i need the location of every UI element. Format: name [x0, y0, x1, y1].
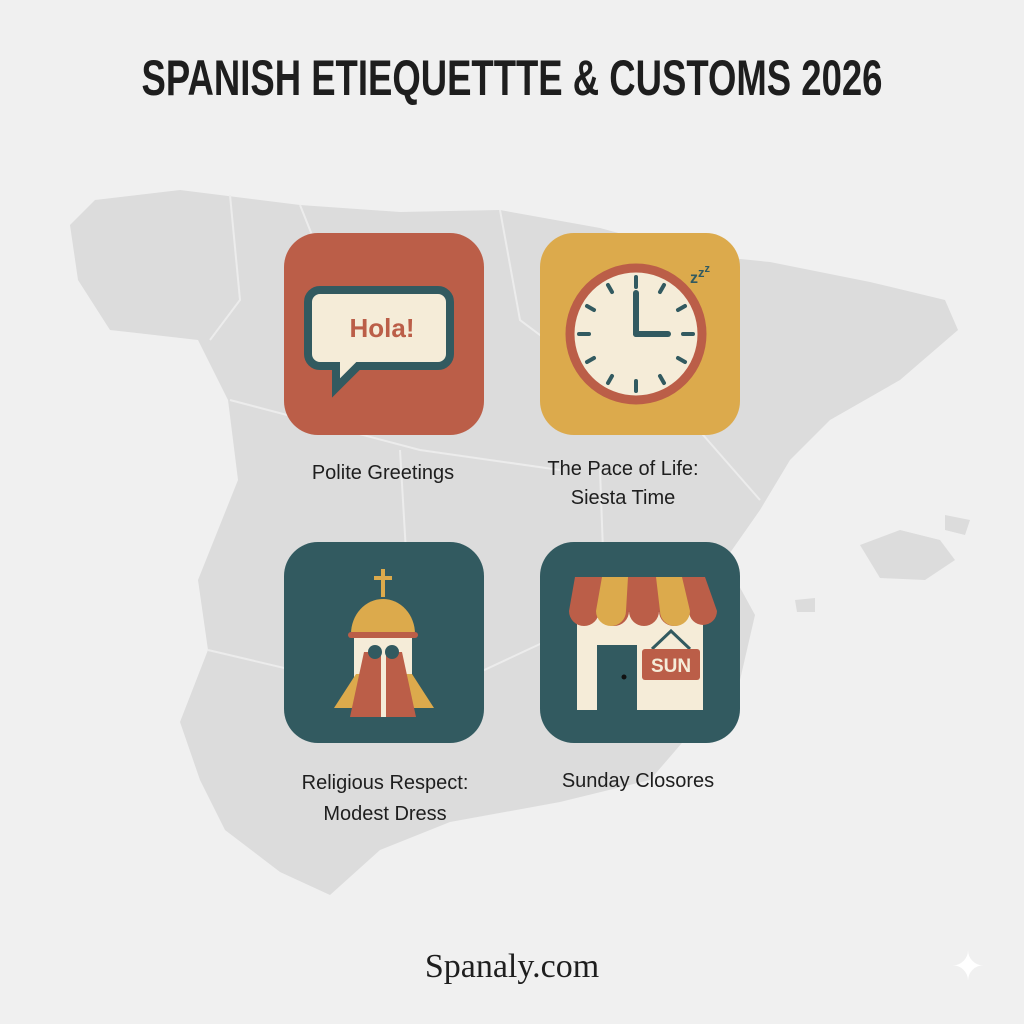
panel: siesta clock icon: z [690, 270, 698, 287]
panel: sunday closures icon: SUN [651, 656, 691, 677]
label: religious respect: Religious Respect: [302, 772, 468, 794]
panel: sunday closures icon [540, 542, 740, 743]
footer: Spanaly.com [425, 948, 599, 985]
panel: siesta clock icon: z [704, 263, 710, 275]
panel: polite greetings icon: Hola! [350, 313, 414, 343]
label: siesta [547, 458, 699, 509]
label: siesta: Siesta Time [571, 487, 675, 509]
label: polite greetings: Polite Greetings [312, 462, 454, 484]
panel: siesta clock icon: z [698, 265, 705, 280]
title: SPANISH ETIEQUETTTE & CUSTOMS 2026 [142, 50, 882, 106]
panel: siesta clock icon [540, 233, 740, 435]
label: religious respect: Modest Dress [323, 803, 447, 825]
label: religious respect [302, 772, 468, 825]
label: siesta: The Pace of Life: [547, 458, 699, 480]
panel: religious respect icon [284, 542, 484, 743]
icon: sparkle: ✦ [951, 945, 985, 989]
panel: polite greetings icon [284, 233, 484, 435]
label: sunday closures: Sunday Closores [562, 770, 714, 792]
